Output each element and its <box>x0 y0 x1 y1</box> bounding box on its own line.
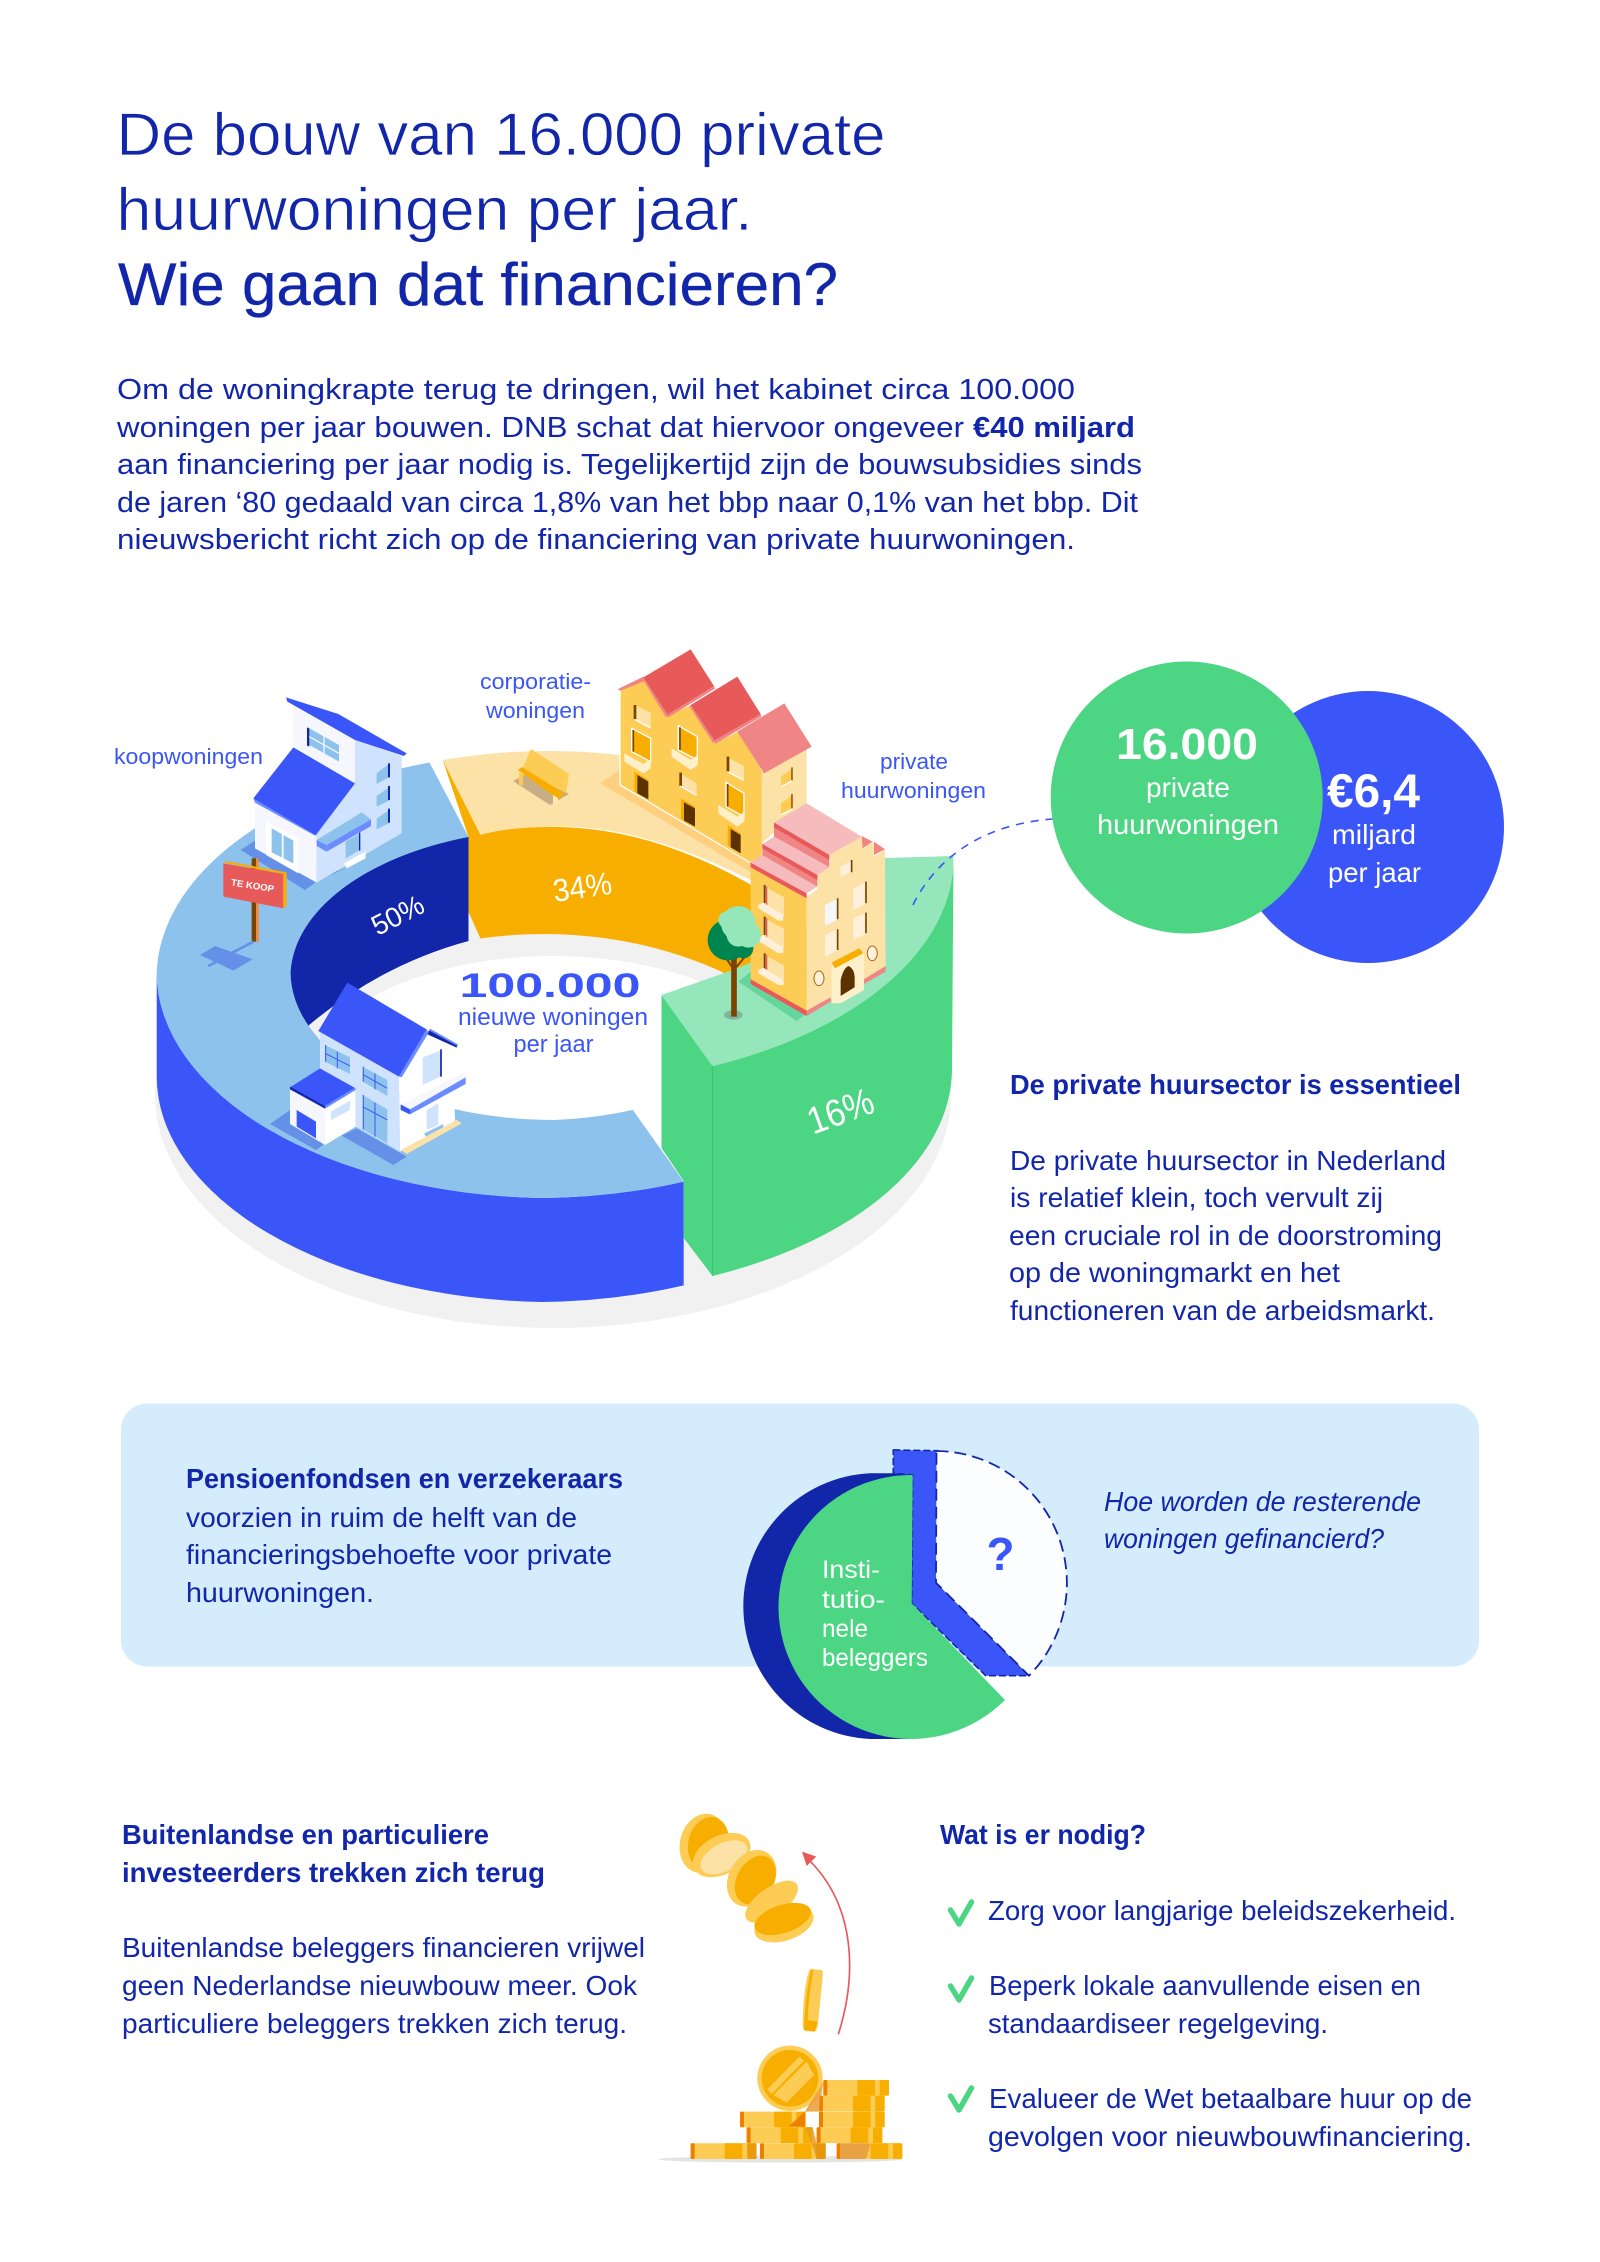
text block: private huursector: een cruciale rol in de doorstroming <box>1009 1220 1442 1251</box>
icon: check 3 <box>950 2088 972 2110</box>
pie unknown depth <box>893 1450 1029 1676</box>
icon: bench <box>513 749 569 805</box>
icon: koopwoning house with for-sale sign <box>200 697 407 971</box>
label: corporatiewoningen: corporatie- <box>480 669 591 694</box>
segment: corporatiewoningen wall <box>443 760 760 1000</box>
segment: koopwoningen inner wall <box>250 837 468 1026</box>
intro text: de jaren ‘80 gedaald van circa 1,8% van het bbp naar 0,1% van het bbp. Dit <box>117 487 1138 519</box>
segment: koopwoningen outer wall <box>157 972 684 1302</box>
text block: pensioenfondsen <box>186 1463 623 1608</box>
text block: buitenlandse investeerders: Buitenlandse beleggers financieren vrijwel <box>122 1932 645 1963</box>
slice label: tutio- <box>822 1586 885 1614</box>
question mark: ? <box>986 1528 1014 1580</box>
icon: row houses <box>600 649 812 872</box>
slice label: nele <box>822 1615 868 1643</box>
title <box>116 101 886 318</box>
segment: corporatiewoningen top <box>443 751 760 885</box>
text block: private huursector: is relatief klein, toch vervult zij <box>1010 1182 1383 1213</box>
text block: buitenlandse investeerders: Buitenlandse en particuliere <box>122 1819 489 1850</box>
segment: private huurwoningen wall <box>662 856 954 1276</box>
pie institutional slice <box>778 1475 1005 1739</box>
icon: check 1 <box>950 1902 972 1924</box>
stat circle: 16.000 private huurwoningen: 16.000 <box>1116 720 1258 769</box>
chart: financing pie <box>743 1450 1067 1739</box>
label: corporatiewoningen <box>480 669 591 723</box>
intro text <box>116 374 1142 556</box>
label: koopwoningen: koopwoningen <box>114 744 263 769</box>
text block: buitenlandse investeerders: investeerders trekken zich terug <box>122 1857 545 1888</box>
icon: apartment building and tree <box>708 803 886 1021</box>
intro text: €40 miljard <box>973 412 1135 444</box>
label: private huurwoningen: private <box>880 749 948 774</box>
text block: buitenlandse investeerders: particuliere beleggers trekken zich terug. <box>122 2008 627 2039</box>
text block: pensioenfondsen: huurwoningen. <box>186 1577 374 1608</box>
illustration: coins flying away <box>658 1808 902 2163</box>
text block: wat is er nodig: gevolgen voor nieuwbouwfinanciering. <box>988 2121 1472 2152</box>
text block: wat is er nodig: Beperk lokale aanvullende eisen en <box>989 1970 1421 2001</box>
text block: wat is er nodig: Wat is er nodig? <box>940 1819 1146 1850</box>
pie depth <box>743 1473 913 1739</box>
question text: woningen gefinancierd? <box>1104 1523 1385 1554</box>
title: Wie gaan dat financieren? <box>118 251 838 318</box>
donut shadow <box>155 862 951 1328</box>
slice label: Insti- <box>822 1556 880 1584</box>
arrow: money leaving <box>802 1852 850 2034</box>
percentage: 50%: 50% <box>366 889 429 942</box>
text block: pensioenfondsen: Pensioenfondsen en verzekeraars <box>186 1463 623 1494</box>
panel: institutionele beleggers <box>121 1404 1479 1666</box>
segment: koopwoningen top <box>157 762 684 1198</box>
pie unknown slice <box>936 1451 1067 1676</box>
icon: check 2 <box>950 1978 972 2000</box>
slice label <box>822 1556 928 1672</box>
text block: private huursector: op de woningmarkt en het <box>1009 1257 1340 1288</box>
label: corporatiewoningen: woningen <box>485 698 585 723</box>
stat circle: 16.000 private huurwoningen: huurwoningen <box>1097 809 1279 840</box>
donut centre label <box>458 967 648 1058</box>
text block: buitenlandse investeerders <box>122 1819 645 2039</box>
connector: dashed line to circles <box>913 819 1053 905</box>
chart: 3D housing donut <box>155 751 954 1328</box>
question text <box>1104 1486 1421 1554</box>
text block: private huursector: De private huursector is essentieel <box>1010 1069 1461 1100</box>
text block: pensioenfondsen: voorzien in ruim de helft van de <box>186 1502 577 1533</box>
icon: koopwoning house with for-sale sign: TE KOOP <box>230 877 275 894</box>
icon: front house <box>270 983 466 1165</box>
label: private huurwoningen: huurwoningen <box>841 778 986 803</box>
stat circle: €6,4 miljard <box>1232 691 1504 963</box>
donut centre label: per jaar <box>514 1031 594 1058</box>
question text: Hoe worden de resterende <box>1104 1486 1421 1517</box>
stat circle: €6,4 miljard: per jaar <box>1328 857 1421 888</box>
text block: wat is er nodig: standaardiseer regelgeving. <box>988 2008 1328 2039</box>
stat circle: €6,4 miljard: €6,4 <box>1327 764 1420 817</box>
stat circle: 16.000 private huurwoningen <box>1051 662 1323 934</box>
text block: wat is er nodig <box>940 1819 1472 2152</box>
intro text: nieuwsbericht richt zich op de financiering van private huurwoningen. <box>117 524 1075 556</box>
text block: pensioenfondsen: financieringsbehoefte voor private <box>186 1539 612 1570</box>
text block: wat is er nodig: Evalueer de Wet betaalbare huur op de <box>989 2083 1472 2114</box>
donut centre label: 100.000 <box>460 967 640 1005</box>
slice label: beleggers <box>822 1644 928 1672</box>
percentage: 16%: 16% <box>802 1081 880 1143</box>
intro text: aan financiering per jaar nodig is. Tegelijkertijd zijn de bouwsubsidies sinds <box>117 449 1142 481</box>
percentage: 34%: 34% <box>551 865 614 909</box>
intro text: Om de woningkrapte terug te dringen, wil het kabinet circa 100.000 <box>117 374 1075 406</box>
stat circle: €6,4 miljard: miljard <box>1332 819 1416 850</box>
title: huurwoningen per jaar. <box>116 176 752 243</box>
stat circle: 16.000 private huurwoningen: private <box>1146 772 1230 803</box>
text block: private huursector: De private huursector in Nederland <box>1010 1145 1446 1176</box>
text block: private huursector <box>1009 1069 1461 1326</box>
donut centre label: nieuwe woningen <box>458 1004 648 1031</box>
label: private huurwoningen <box>841 749 986 803</box>
title: De bouw van 16.000 private <box>116 101 886 168</box>
segment: private huurwoningen top <box>662 856 954 1066</box>
text block: wat is er nodig: Zorg voor langjarige beleidszekerheid. <box>988 1895 1456 1926</box>
text block: buitenlandse investeerders: geen Nederlandse nieuwbouw meer. Ook <box>122 1970 637 2001</box>
intro text: woningen per jaar bouwen. DNB schat dat hiervoor ongeveer <box>116 412 964 444</box>
text block: private huursector: functioneren van de arbeidsmarkt. <box>1010 1295 1435 1326</box>
